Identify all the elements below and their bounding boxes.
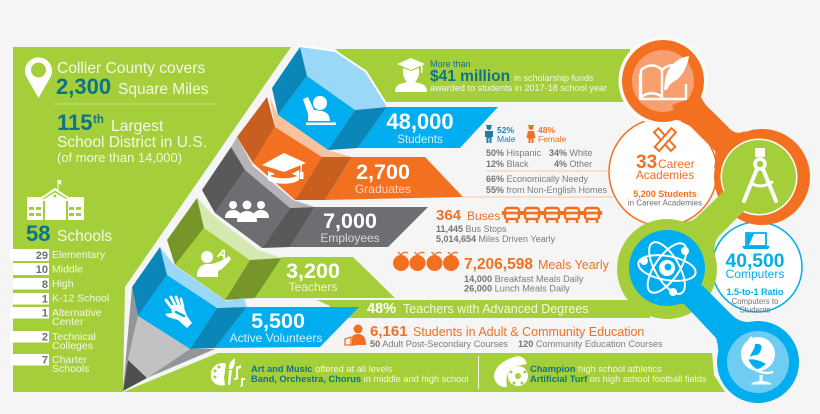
- text: district rank: 115: [57, 110, 92, 135]
- list: school types: 8: [42, 279, 48, 291]
- list: school types: K-12 School: [52, 292, 109, 304]
- text: adult education: 50 Adult Post-Secondary Courses: [370, 339, 508, 349]
- text: computers: Computers to: [732, 297, 779, 306]
- icon: football and soccer ball: [494, 356, 528, 387]
- text: advanced degrees: Teachers with Advanced Degrees: [403, 302, 589, 316]
- list: school types: 2: [42, 332, 48, 344]
- list: school types: 1: [42, 308, 48, 320]
- icon: female figure: [526, 125, 536, 143]
- icon: school building: [27, 180, 84, 220]
- text: meals: Meals Yearly: [538, 258, 610, 272]
- link: atom to globe: [670, 270, 760, 364]
- text: career academies: Academies: [636, 168, 694, 182]
- icon: adult learner: [345, 324, 366, 345]
- banner text: employees: [320, 209, 380, 245]
- icons: buses: [503, 208, 601, 223]
- list: school types: Charter: [52, 354, 88, 366]
- text: career academies: Career: [658, 157, 695, 171]
- panel: advanced degrees band: [317, 300, 650, 318]
- panel: scholarship band: [335, 49, 630, 102]
- text: arts: Art and Music offered at all levels: [251, 364, 393, 374]
- text: career academies: [628, 152, 702, 208]
- panel: green background: [13, 47, 291, 392]
- banner text: employees: Employees: [320, 231, 380, 245]
- text: female: 48%: [538, 125, 555, 135]
- panel: bottom band: [123, 353, 725, 392]
- text: county size: Collier County covers: [57, 60, 205, 77]
- list: school types: Middle: [52, 264, 83, 276]
- text: meals: 7,206,598: [464, 256, 533, 273]
- circle: compass: [714, 129, 810, 225]
- text: computers: Computers: [726, 267, 784, 281]
- banner text: teachers: Teachers: [289, 280, 337, 294]
- list: school types: [10, 249, 109, 375]
- text: demographics: [486, 148, 593, 169]
- icon: helping hand: [165, 297, 192, 328]
- pencil tip: [123, 287, 215, 391]
- banner text: teachers: 3,200: [286, 259, 340, 283]
- text: computers: [726, 251, 784, 314]
- text: demographics: 34% White: [549, 148, 593, 158]
- text: meals: [464, 256, 610, 294]
- list: school types: Colleges: [52, 340, 93, 352]
- segment: teachers: [167, 198, 395, 300]
- icon: book and quill: [640, 56, 689, 100]
- circle: globe: [717, 321, 799, 403]
- text: advanced degrees: 48%: [367, 301, 396, 317]
- text: athletics: [530, 364, 707, 384]
- list: school types: Schools: [52, 363, 89, 375]
- icon: teacher pointing: [197, 245, 231, 277]
- banner text: students: [386, 109, 454, 146]
- link: book to compass: [672, 95, 745, 170]
- text: student needs: [486, 174, 608, 195]
- text: adult education: [370, 323, 663, 349]
- text: district rank: School District in U.S.: [57, 134, 207, 151]
- text: scholarship: $41 million: [430, 68, 510, 85]
- list: school types: 29: [36, 250, 48, 262]
- icon: raised hand student: [303, 96, 336, 125]
- text: district rank: th: [93, 114, 104, 126]
- text: meals: 14,000 Breakfast Meals Daily: [464, 274, 584, 284]
- text: schools heading: [26, 221, 112, 246]
- text: buses: 364: [436, 207, 462, 224]
- text: district rank: (of more than 14,000): [57, 150, 182, 165]
- segment: volunteers: [132, 247, 359, 349]
- icon: employees group: [225, 200, 269, 222]
- text: county size: [56, 60, 209, 99]
- text: arts: [251, 364, 469, 384]
- banner text: students: Students: [397, 134, 443, 146]
- segment: employees: [202, 137, 428, 248]
- segment: graduates: [237, 97, 463, 200]
- text: schools heading: 58: [26, 221, 50, 246]
- infographic circles: [609, 36, 810, 403]
- text: adult education: Students in Adult & Community Education: [413, 325, 644, 339]
- list: school types: High: [52, 278, 74, 290]
- segment: students: [272, 47, 498, 150]
- circle: computers: [712, 222, 802, 312]
- banner text: volunteers: [230, 309, 322, 345]
- text: demographics: 4% Other: [554, 159, 592, 169]
- text: scholarship: in scholarship funds: [514, 73, 594, 83]
- banner text: students: 48,000: [386, 109, 454, 134]
- list: school types: 7: [42, 354, 48, 366]
- list: school types: Elementary: [52, 249, 106, 261]
- text: scholarship: More than: [430, 59, 471, 69]
- text: computers: 1.5-to-1 Ratio: [726, 287, 784, 297]
- text: arts: Band, Orchestra, Chorus in middle and high school: [251, 374, 469, 384]
- banner text: graduates: 2,700: [356, 160, 410, 184]
- icon: teacher pointing: A: [216, 245, 230, 263]
- text: athletics: Artificial Turf on high school football fields: [530, 374, 707, 384]
- text: scholarship: [430, 59, 607, 93]
- icon: atom: [636, 237, 698, 299]
- circle: book: [618, 36, 708, 126]
- text: female: [538, 125, 567, 144]
- list: school types: Alternative: [52, 307, 102, 319]
- text: county size: 2,300: [56, 74, 111, 99]
- text: male: 52%: [497, 125, 514, 135]
- list: school types: Center: [52, 316, 84, 328]
- text: computers: 40,500: [726, 251, 784, 272]
- pencil illustration: [123, 47, 498, 391]
- text: career academies: 5,200 Students: [633, 189, 697, 199]
- banner text: graduates: [355, 160, 411, 196]
- text: demographics: 12% Black: [486, 159, 529, 169]
- banner text: volunteers: Active Volunteers: [230, 331, 322, 345]
- text: student needs: 55% from Non-English Homes: [486, 185, 608, 195]
- circle: atom: [617, 219, 717, 319]
- text: buses: Buses: [467, 209, 500, 223]
- text: career academies: 33: [636, 152, 657, 173]
- icon: location pin: [25, 57, 52, 98]
- icon: laptop: [742, 233, 770, 249]
- text: male: [497, 125, 516, 144]
- text: buses: 5,014,654 Miles Driven Yearly: [436, 234, 556, 244]
- text: adult education: 6,161: [370, 323, 408, 340]
- text: meals: 26,000 Lunch Meals Daily: [464, 284, 570, 294]
- text: student needs: 66% Economically Needy: [486, 174, 589, 184]
- icon: palette and music: [211, 358, 245, 387]
- text: district rank: [57, 110, 207, 165]
- text: demographics: 50% Hispanic: [486, 148, 542, 158]
- icon: compass: [744, 148, 776, 201]
- icon: crossed pencils: [654, 128, 676, 151]
- banner text: graduates: Graduates: [355, 182, 411, 196]
- icons: apples: [393, 252, 459, 271]
- text: career academies: in Career Academies: [628, 198, 702, 208]
- link: atom to compass: [680, 190, 745, 262]
- text: district rank: Largest: [111, 118, 164, 135]
- text: athletics: Champion high school athletics: [530, 364, 662, 374]
- icon: globe: [741, 337, 775, 384]
- text: schools heading: Schools: [57, 228, 112, 245]
- text: buses: 11,445 Bus Stops: [436, 224, 507, 234]
- icon: male figure: [485, 125, 493, 143]
- banner text: volunteers: 5,500: [251, 309, 305, 333]
- banner text: employees: 7,000: [323, 209, 377, 233]
- text: female: Female: [538, 134, 567, 144]
- list: school types: 1: [42, 294, 48, 306]
- list: school types: 10: [36, 264, 48, 276]
- text: computers: Students: [740, 306, 770, 314]
- text: buses: [436, 207, 556, 244]
- list: school types: Technical: [52, 331, 96, 343]
- text: county size: Square Miles: [118, 81, 209, 98]
- banner text: teachers: [286, 259, 340, 294]
- text: adult education: 120 Community Education Courses: [518, 339, 663, 349]
- icon: graduate: [395, 58, 427, 92]
- text: scholarship: awarded to students in 2017-18 school year: [430, 83, 607, 93]
- text: male: Male: [497, 134, 516, 144]
- icon: graduation cap: [262, 153, 306, 184]
- circle: career academies: [609, 118, 717, 226]
